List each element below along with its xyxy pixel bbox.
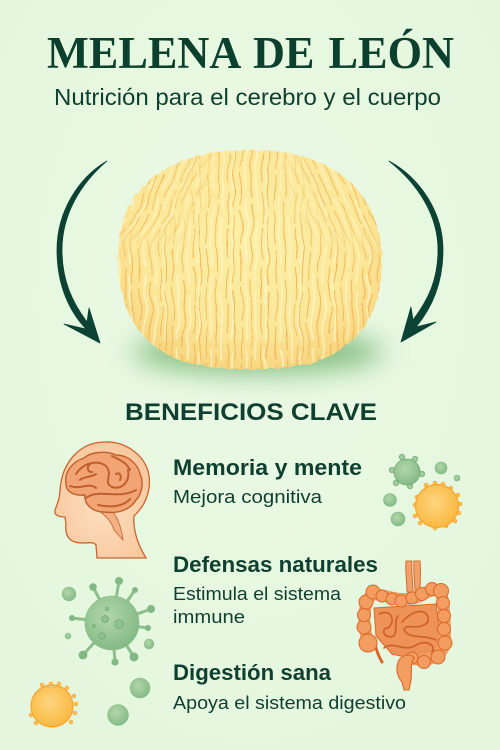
green virus bbox=[392, 457, 422, 486]
icon: green spheres and orange cell bottom left bbox=[29, 587, 154, 727]
mushroom illustration bbox=[117, 149, 392, 391]
virus body bbox=[85, 596, 139, 650]
item: memory: Mejora cognitiva bbox=[173, 486, 323, 507]
item: memory: Memoria y mente bbox=[173, 455, 362, 480]
mushroom fur texture bbox=[118, 150, 382, 370]
orange cell bbox=[413, 481, 462, 530]
large intestine segments bbox=[357, 582, 452, 668]
arrow: left bbox=[57, 161, 107, 343]
item: defenses: Estimula el sistema bbox=[173, 583, 342, 604]
small intestine bbox=[374, 604, 442, 660]
icon: germs top right bbox=[384, 454, 462, 530]
brain stem bbox=[97, 505, 123, 540]
item: digestion: Apoya el sistema digestivo bbox=[173, 692, 406, 713]
spike tips bbox=[69, 577, 155, 666]
title: MELENA DE LEÓN bbox=[47, 28, 454, 78]
small intestine loops bbox=[379, 612, 436, 652]
subtitle: Nutrición para el cerebro y el cuerpo bbox=[54, 84, 441, 110]
arrow: right bbox=[389, 161, 443, 342]
head silhouette bbox=[55, 442, 149, 558]
brain folds bbox=[70, 456, 136, 506]
item: memory bbox=[173, 455, 362, 507]
item: digestion: Digestión sana bbox=[173, 660, 331, 685]
mushroom body bbox=[118, 150, 382, 369]
item: defenses: immune bbox=[173, 606, 245, 627]
large intestine tube bbox=[364, 590, 445, 660]
virus spikes bbox=[72, 581, 151, 662]
ground shadow bbox=[133, 330, 383, 374]
esophagus bbox=[406, 561, 420, 592]
small green spheres bbox=[384, 462, 460, 526]
item: digestion bbox=[173, 660, 406, 713]
appendix bbox=[374, 640, 382, 662]
heading: key benefits: BENEFICIOS CLAVE bbox=[125, 399, 377, 426]
brain bbox=[66, 452, 142, 512]
rectum bbox=[397, 655, 414, 690]
icon: large green virus bbox=[69, 577, 155, 666]
item: defenses: Defensas naturales bbox=[173, 552, 378, 577]
item: defenses bbox=[173, 552, 378, 627]
icon: head with brain bbox=[55, 442, 149, 558]
virus dots bbox=[93, 607, 123, 639]
icon: intestines bbox=[357, 561, 452, 690]
